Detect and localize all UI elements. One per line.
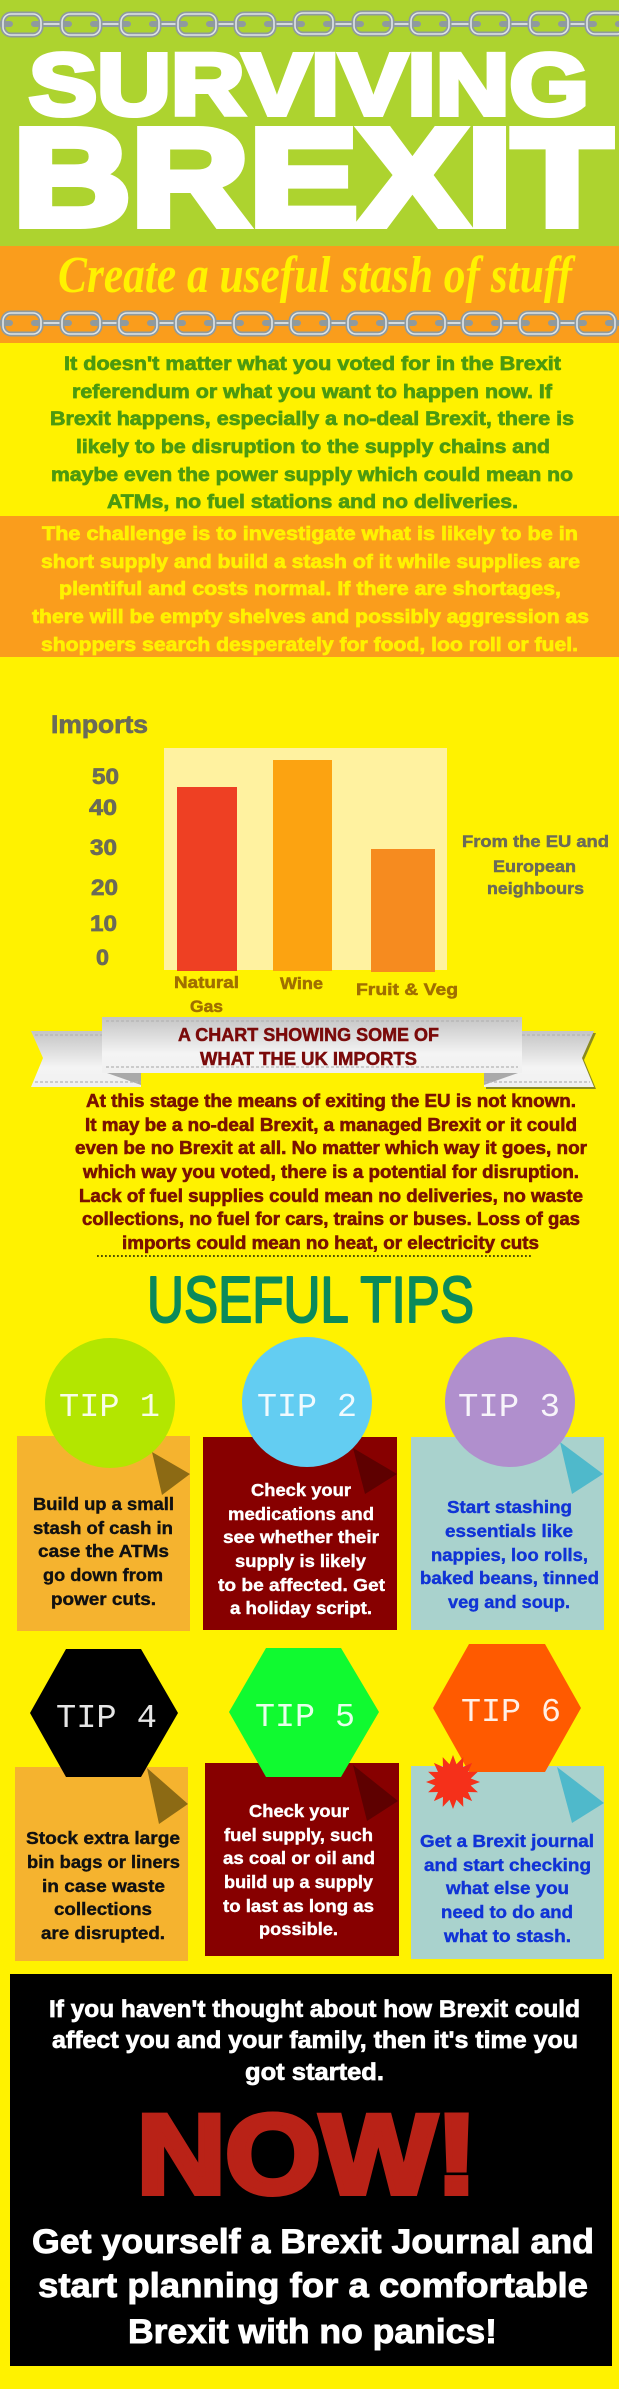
disruption paragraph: imports could mean no heat, or electricity cuts [122,1233,539,1253]
tip 6: TIP 6 [461,1694,561,1731]
challenge text: The challenge is to investigate what is likely to be in [42,524,578,545]
intro paragraph: Brexit happens, especially a no-deal Brexit, there is [50,409,574,430]
disruption paragraph: collections, no fuel for cars, trains or buses. Loss of gas [82,1209,580,1229]
challenge text: plentiful and costs normal. If there are shortages, [59,579,561,600]
title: brexit: BREXIT [13,101,612,255]
closing text [32,2223,594,2351]
tip 2: medications and [228,1504,374,1524]
tip 3: TIP 3 [458,1389,560,1426]
y axis labels: 40 [89,795,117,820]
tip 3 [411,1337,604,1630]
disruption paragraph: even be no Brexit at all. No matter which way it goes, nor [75,1138,587,1158]
tip 5: possible. [259,1919,338,1939]
call to action panel [10,1974,612,2366]
chart note: European [493,857,576,876]
disruption paragraph: At this stage the means of exiting the EU is not known. [86,1091,576,1111]
tip 4: Stock extra large [26,1828,180,1848]
intro paragraph: referendum or what you want to happen now. If [72,382,553,403]
y axis labels: 0 [96,945,109,970]
disruption paragraph: which way you voted, there is a potential for disruption. [82,1162,579,1182]
tip 4: bin bags or liners [27,1852,180,1872]
intro text: affect you and your family, then it's time you [52,2027,578,2054]
tip 2: TIP 2 [257,1389,357,1426]
closing text: Get yourself a Brexit Journal and [32,2223,594,2261]
tip 2: a holiday script. [230,1598,372,1618]
chart title: Imports [51,711,148,739]
tip 6 [411,1644,604,1959]
tip 2: see whether their [223,1527,379,1547]
tip 5: to last as long as [223,1896,374,1916]
tip 4: collections [54,1899,152,1919]
chart note [462,832,609,898]
intro paragraph [50,354,574,513]
tip 3: nappies, loo rolls, [431,1545,588,1565]
tip 5: fuel supply, such [224,1825,373,1845]
tip 6: Get a Brexit journal [420,1831,594,1851]
tip 2: Check your [251,1480,351,1500]
tip 2: supply is likely [235,1551,366,1571]
intro paragraph: ATMs, no fuel stations and no deliveries. [107,492,518,513]
closing text: start planning for a comfortable [38,2267,588,2305]
chart note: From the EU and [462,832,609,851]
tip 1 [17,1338,190,1631]
disruption paragraph: It may be a no-deal Brexit, a managed Brexit or it could [85,1115,577,1135]
challenge text [32,524,589,656]
disruption paragraph: Lack of fuel supplies could mean no deliveries, no waste [79,1186,583,1206]
tip 1: go down from [43,1565,163,1585]
tip 2 [203,1337,397,1630]
now: NOW! [137,2092,477,2217]
chain: top [0,13,619,35]
tip 5: Check your [249,1801,349,1821]
intro paragraph: likely to be disruption to the supply chains and [76,437,550,458]
tip 3: essentials like [445,1521,573,1541]
tip 3: baked beans, tinned [420,1568,599,1588]
heading: useful tips: USEFUL TIPS [147,1263,474,1336]
y axis labels: 10 [90,911,117,936]
bar: wine [273,760,332,971]
ribbon text: WHAT THE UK IMPORTS [200,1049,417,1069]
intro text [49,1996,580,2086]
intro text: got started. [245,2059,384,2086]
tip 3: Start stashing [447,1497,572,1517]
tip 5: build up a supply [224,1872,373,1892]
tip 6: and start checking [424,1855,591,1875]
challenge text: short supply and build a stash of it while supplies are [41,552,580,573]
tip 3: veg and soup. [448,1592,570,1612]
bar: fruit and veg [371,849,435,972]
chain: bottom [0,313,619,334]
y axis labels: 30 [90,835,117,860]
y axis labels: 20 [91,875,118,900]
title: surviving: SURVIVING [29,36,589,134]
tip 5: as coal or oil and [223,1848,375,1868]
challenge panel [0,516,619,657]
chart note: neighbours [487,879,584,898]
intro text: If you haven't thought about how Brexit could [49,1996,580,2023]
tip 4: TIP 4 [56,1700,157,1737]
tip 1: power cuts. [51,1589,156,1609]
x axis labels: Wine [280,974,323,993]
tip 4 [15,1649,188,1961]
challenge text: there will be empty shelves and possibly aggression as [32,607,589,628]
tip 1: stash of cash in [33,1518,173,1538]
bar chart: imports [51,711,609,1016]
ribbon text [178,1025,439,1069]
subtitle band [0,246,619,343]
tip 5: TIP 5 [255,1699,355,1736]
y axis labels: 50 [92,764,119,789]
tip 4: are disrupted. [41,1923,165,1943]
y axis labels [89,764,119,970]
closing text: Brexit with no panics! [128,2313,497,2351]
ribbon text: A CHART SHOWING SOME OF [178,1025,439,1045]
tip 6: what else you [445,1878,569,1898]
tip 4: in case waste [42,1876,165,1896]
tip 5 [205,1648,399,1956]
header panel [0,0,619,255]
x axis labels [174,973,458,1016]
tip 6: need to do and [441,1902,573,1922]
intro paragraph: maybe even the power supply which could mean no [51,465,573,486]
x axis labels: Fruit & Veg [356,980,458,999]
x axis labels: Gas [190,997,223,1016]
tip 1: Build up a small [33,1494,174,1514]
bar: natural gas [177,787,237,971]
disruption paragraph [75,1091,587,1253]
challenge text: shoppers search desperately for food, loo roll or fuel. [41,635,578,656]
chart background [164,748,447,970]
tip 2: to be affected. Get [218,1575,385,1595]
tip 1: case the ATMs [38,1541,169,1561]
ribbon banner [31,1017,596,1089]
intro paragraph: It doesn't matter what you voted for in the Brexit [64,354,562,375]
tip 1: TIP 1 [59,1389,160,1426]
tip 6: what to stash. [443,1926,571,1946]
x axis labels: Natural [174,973,239,992]
